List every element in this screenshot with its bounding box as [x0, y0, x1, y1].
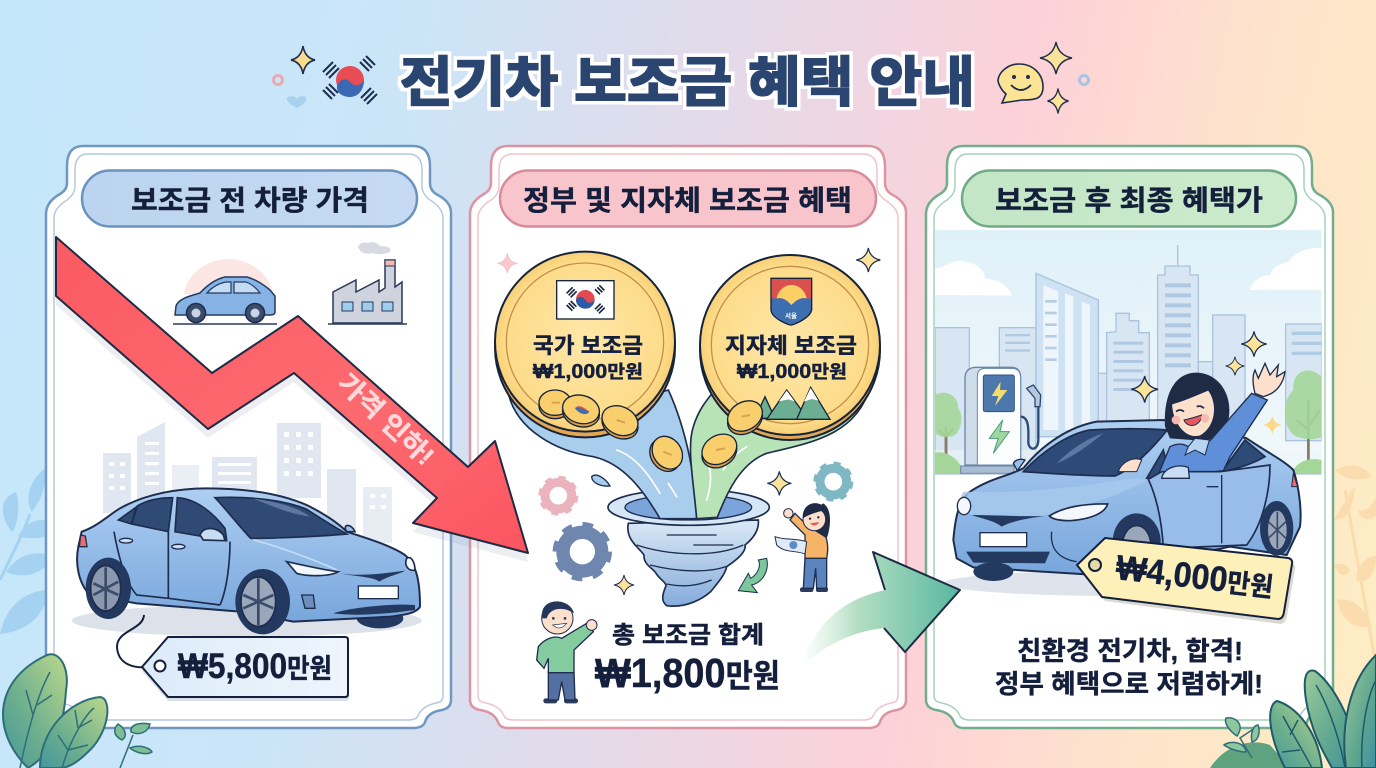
icon: small car [173, 259, 277, 324]
small falling coins [539, 390, 768, 477]
coin text: national [533, 334, 643, 383]
person: girl with bill [775, 503, 830, 592]
background leaves: left [0, 468, 46, 634]
sprig [115, 723, 152, 768]
closing message [995, 636, 1263, 699]
trees [935, 370, 1322, 474]
heading pill: 보조금 전 차량 가격 [131, 185, 369, 216]
closing message: 정부 혜택으로 저렴하게! [995, 669, 1263, 699]
background leaves: right [1334, 465, 1376, 660]
emblem [771, 278, 812, 325]
funnel illustration [495, 248, 880, 703]
person: woman waving [1118, 363, 1285, 478]
panel: subsidy [470, 146, 906, 728]
closing message: 친환경 전기차, 합격! [1017, 636, 1243, 666]
coin text: national: ₩1,000 만원 [533, 361, 643, 383]
title: 전기차 보조금 혜택 안내 [400, 53, 975, 113]
funnel [608, 489, 769, 606]
panel: before subsidy [46, 146, 451, 728]
car front details [957, 465, 1293, 581]
total subsidy text: 총 보조금 합계 [612, 622, 764, 649]
coin text: local: 지자체 보조금 [725, 334, 857, 358]
national coin [495, 252, 675, 437]
icon: taegeuk [323, 56, 377, 104]
icon: sparkles [497, 248, 880, 595]
icon: gears [542, 465, 850, 576]
total subsidy text [595, 622, 780, 696]
heading pill [82, 170, 417, 226]
price tag: final: ₩4,000만원 [1114, 548, 1275, 605]
icon: title decorations left [274, 46, 377, 108]
arrow: price drop [56, 237, 528, 562]
plant: bottom left [3, 654, 152, 768]
icon: factory [328, 242, 407, 324]
panel: final price [926, 146, 1333, 728]
coin text: local: 서울 [785, 311, 797, 320]
heading pill: 정부 및 지자체 보조금 혜택 [523, 185, 852, 216]
coin text: national: 국가 보조금 [533, 334, 643, 358]
city scene with car and driver [935, 230, 1322, 596]
price tag: before subsidy [117, 615, 349, 701]
mountains [755, 387, 830, 419]
heading pill [962, 170, 1296, 226]
icon: sparkles [1131, 331, 1282, 434]
flag [557, 281, 614, 319]
road [943, 571, 1290, 596]
car body [953, 420, 1301, 575]
local coin [700, 255, 880, 440]
total subsidy text: ₩1,800만원 [595, 650, 780, 696]
coin text: local: ₩1,000 만원 [737, 361, 847, 383]
plant: bottom right [1210, 655, 1376, 768]
icon: smiley speech bubble and sparkles [998, 42, 1088, 114]
heading pill [500, 170, 876, 226]
price tag: before subsidy: ₩5,800만원 [178, 647, 332, 686]
sky and buildings [935, 230, 1322, 478]
price tag: final [1077, 538, 1295, 624]
icon: swirl arrow [738, 558, 767, 593]
sprig [1224, 718, 1259, 758]
arrow: to final price [800, 552, 960, 668]
illustration: blue electric car [72, 488, 422, 637]
city silhouette [103, 422, 392, 543]
charger [961, 367, 1041, 473]
heading pill: 보조금 후 최종 혜택가 [995, 185, 1263, 216]
person: man pointing [537, 601, 597, 703]
coin text: local [725, 311, 857, 383]
arrow label: 가격 인하! [332, 367, 440, 471]
blue and green streams [508, 387, 870, 519]
